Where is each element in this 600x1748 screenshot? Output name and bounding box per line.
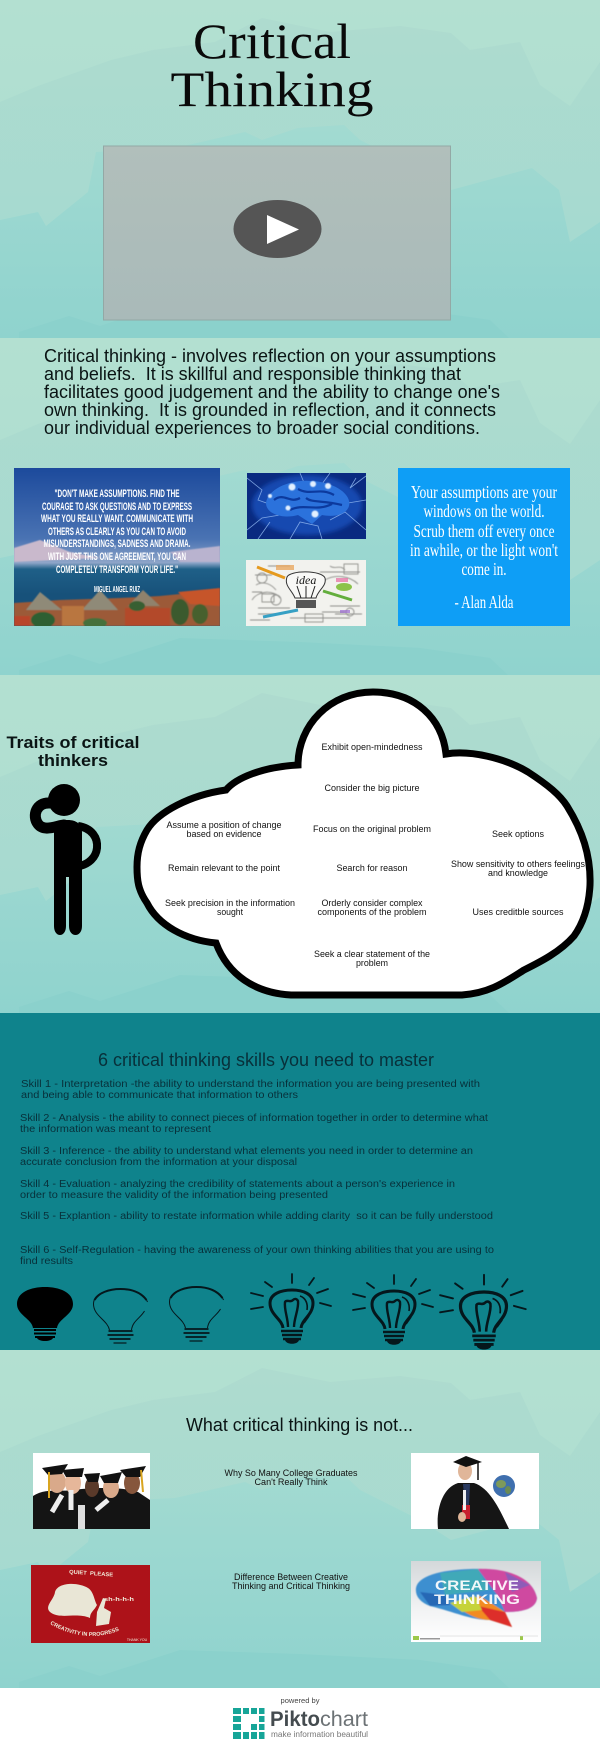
intro text: our individual experiences to broader social conditions. <box>44 417 480 438</box>
wordmark: make information beautiful <box>271 1730 368 1739</box>
trait labels: Focus on the original problem <box>313 824 431 834</box>
panel: six skills <box>0 1013 600 1350</box>
image: creativity in progress poster: THANK YOU <box>127 1638 148 1642</box>
trait labels: Consider the big picture <box>324 783 420 793</box>
icon: outline bulb <box>170 1287 224 1341</box>
trait labels: Seek precision in the information <box>165 898 295 908</box>
heading: what critical thinking is not: What critical thinking is not... <box>186 1415 413 1435</box>
skill 1: Skill 1 - Interpretation -the ability to understand the information you are being presented with <box>21 1079 480 1090</box>
image: creativity in progress poster: QUIET PLEASE <box>69 1569 114 1579</box>
image: quote poster <box>14 468 220 628</box>
trait labels: Search for reason <box>336 863 408 873</box>
image: graduates group <box>33 1453 150 1529</box>
trait labels: Show sensitivity to others feelings <box>451 859 585 869</box>
skill 4: order to measure the validity of the information being presented <box>20 1190 328 1201</box>
quote box: Alan Alda: come in. <box>462 559 506 579</box>
icon: Piktochart logo <box>233 1708 264 1739</box>
intro text: own thinking. It is grounded in reflection, and it connects <box>44 399 496 420</box>
image: quote poster: MISUNDERSTANDINGS, SADNESS AND DRAMA. <box>44 538 190 550</box>
image: creativity in progress poster: CREATIVITY IN PROGRESS <box>50 1621 119 1636</box>
image: graduate with globe <box>411 1453 539 1529</box>
trait labels: Orderly consider complex <box>322 898 423 908</box>
wordmark: Pikto <box>270 1708 320 1731</box>
quote box: Alan Alda <box>398 468 570 626</box>
caption: creative vs critical <box>232 1572 350 1591</box>
quote box: Alan Alda: windows on the world. <box>424 501 544 521</box>
trait labels: Uses creditble sources <box>472 907 564 917</box>
caption: creative vs critical: Difference Between Creative <box>234 1572 348 1582</box>
trait labels: components of the problem <box>318 907 426 917</box>
caption: creative vs critical: Thinking and Critical Thinking <box>232 1581 350 1591</box>
trait labels <box>165 742 585 968</box>
heading: traits <box>6 733 140 770</box>
skill 3 <box>20 1146 473 1168</box>
quote box: Alan Alda: Scrub them off every once <box>414 521 555 541</box>
thought cloud <box>137 692 590 995</box>
quote box: Alan Alda: - Alan Alda <box>454 592 514 612</box>
skill 6: find results <box>20 1256 73 1267</box>
intro text: and beliefs. It is skillful and responsible thinking that <box>44 363 461 384</box>
trait labels: problem <box>356 958 388 968</box>
trait labels: Exhibit open-mindedness <box>322 742 423 752</box>
image: creative thinking brain <box>411 1561 541 1642</box>
trait labels: Assume a position of change <box>166 820 282 830</box>
caption: college graduates <box>224 1468 358 1487</box>
title: Thinking <box>170 61 374 117</box>
intro text: Critical thinking - involves reflection on your assumptions <box>44 345 496 366</box>
heading: traits: Traits of critical <box>6 733 140 752</box>
video placeholder <box>104 146 450 320</box>
caption: college graduates: Can't Really Think <box>254 1477 328 1487</box>
image: glowing brain <box>247 473 366 539</box>
icon: thinking person <box>35 784 97 935</box>
footer <box>0 1688 600 1748</box>
trait labels: based on evidence <box>186 829 262 839</box>
image: quote poster: WITH JUST THIS ONE AGREEMENT, YOU CAN <box>48 551 186 563</box>
intro text: facilitates good judgement and the ability to change one's <box>44 381 500 402</box>
image: creativity in progress poster <box>31 1565 150 1643</box>
wordmark <box>270 1708 368 1739</box>
icon: lit bulb <box>440 1275 526 1350</box>
trait labels: and knowledge <box>488 868 548 878</box>
skill 3: Skill 3 - Inference - the ability to understand what elements you need in order to determine an <box>20 1146 473 1157</box>
skill 3: accurate conclusion from the information at your disposal <box>20 1157 297 1168</box>
skill 2: the information was meant to represent <box>20 1124 211 1135</box>
image: creative thinking brain: CREATIVE <box>435 1577 519 1593</box>
intro text <box>44 345 500 438</box>
image: idea light bulb sketch: idea <box>296 573 316 587</box>
skill 2 <box>20 1113 488 1135</box>
trait labels: Seek a clear statement of the <box>314 949 430 959</box>
image: quote poster: WHAT YOU REALLY WANT. COMMUNICATE WITH <box>41 513 193 525</box>
image: quote poster: COMPLETELY TRANSFORM YOUR LIFE." <box>56 564 178 576</box>
heading: traits: thinkers <box>38 751 108 770</box>
trait labels: sought <box>217 907 243 917</box>
skill 6 <box>20 1245 494 1267</box>
image: quote poster: OTHERS AS CLEARLY AS YOU CAN TO AVOID <box>48 526 186 538</box>
skills heading: 6 critical thinking skills you need to master <box>98 1050 434 1070</box>
caption: college graduates: Why So Many College Graduates <box>224 1468 358 1478</box>
skill 1: and being able to communicate that information to others <box>21 1090 298 1101</box>
image: quote poster: COURAGE TO ASK QUESTIONS AND TO EXPRESS <box>42 501 192 513</box>
image: creativity in progress poster: sh-h-h-h <box>104 1597 134 1603</box>
skill 1 <box>21 1079 480 1101</box>
title: Critical <box>193 13 351 69</box>
skill 4 <box>20 1179 455 1201</box>
image: quote poster: "DON'T MAKE ASSUMPTIONS. FIND THE <box>54 488 180 500</box>
trait labels: Seek options <box>492 829 544 839</box>
icon: lit bulb <box>353 1275 433 1345</box>
trait labels: Remain relevant to the point <box>168 863 280 873</box>
icon: lit bulb <box>251 1274 331 1344</box>
skill 5: Skill 5 - Explantion - ability to restate information while adding clarity so it can be fully understood <box>20 1211 493 1222</box>
image: quote poster: MIGUEL ANGEL RUIZ <box>94 585 140 594</box>
skill 6: Skill 6 - Self-Regulation - having the awareness of your own thinking abilities that you are using to <box>20 1245 494 1256</box>
wordmark: chart <box>320 1708 368 1731</box>
icon: play button <box>234 200 322 258</box>
icon: black bulb <box>17 1287 73 1341</box>
powered by: powered by <box>280 1696 320 1705</box>
icon: outline bulb <box>94 1289 148 1343</box>
skill 4: Skill 4 - Evaluation - analyzing the credibility of statements about a person's experience in <box>20 1179 455 1190</box>
skill 2: Skill 2 - Analysis - the ability to connect pieces of information together in order to determine what <box>20 1113 488 1124</box>
quote box: Alan Alda: Your assumptions are your <box>411 482 557 502</box>
image: creative thinking brain: THINKING <box>434 1591 520 1607</box>
image: idea light bulb sketch <box>246 560 366 626</box>
title <box>170 13 374 117</box>
